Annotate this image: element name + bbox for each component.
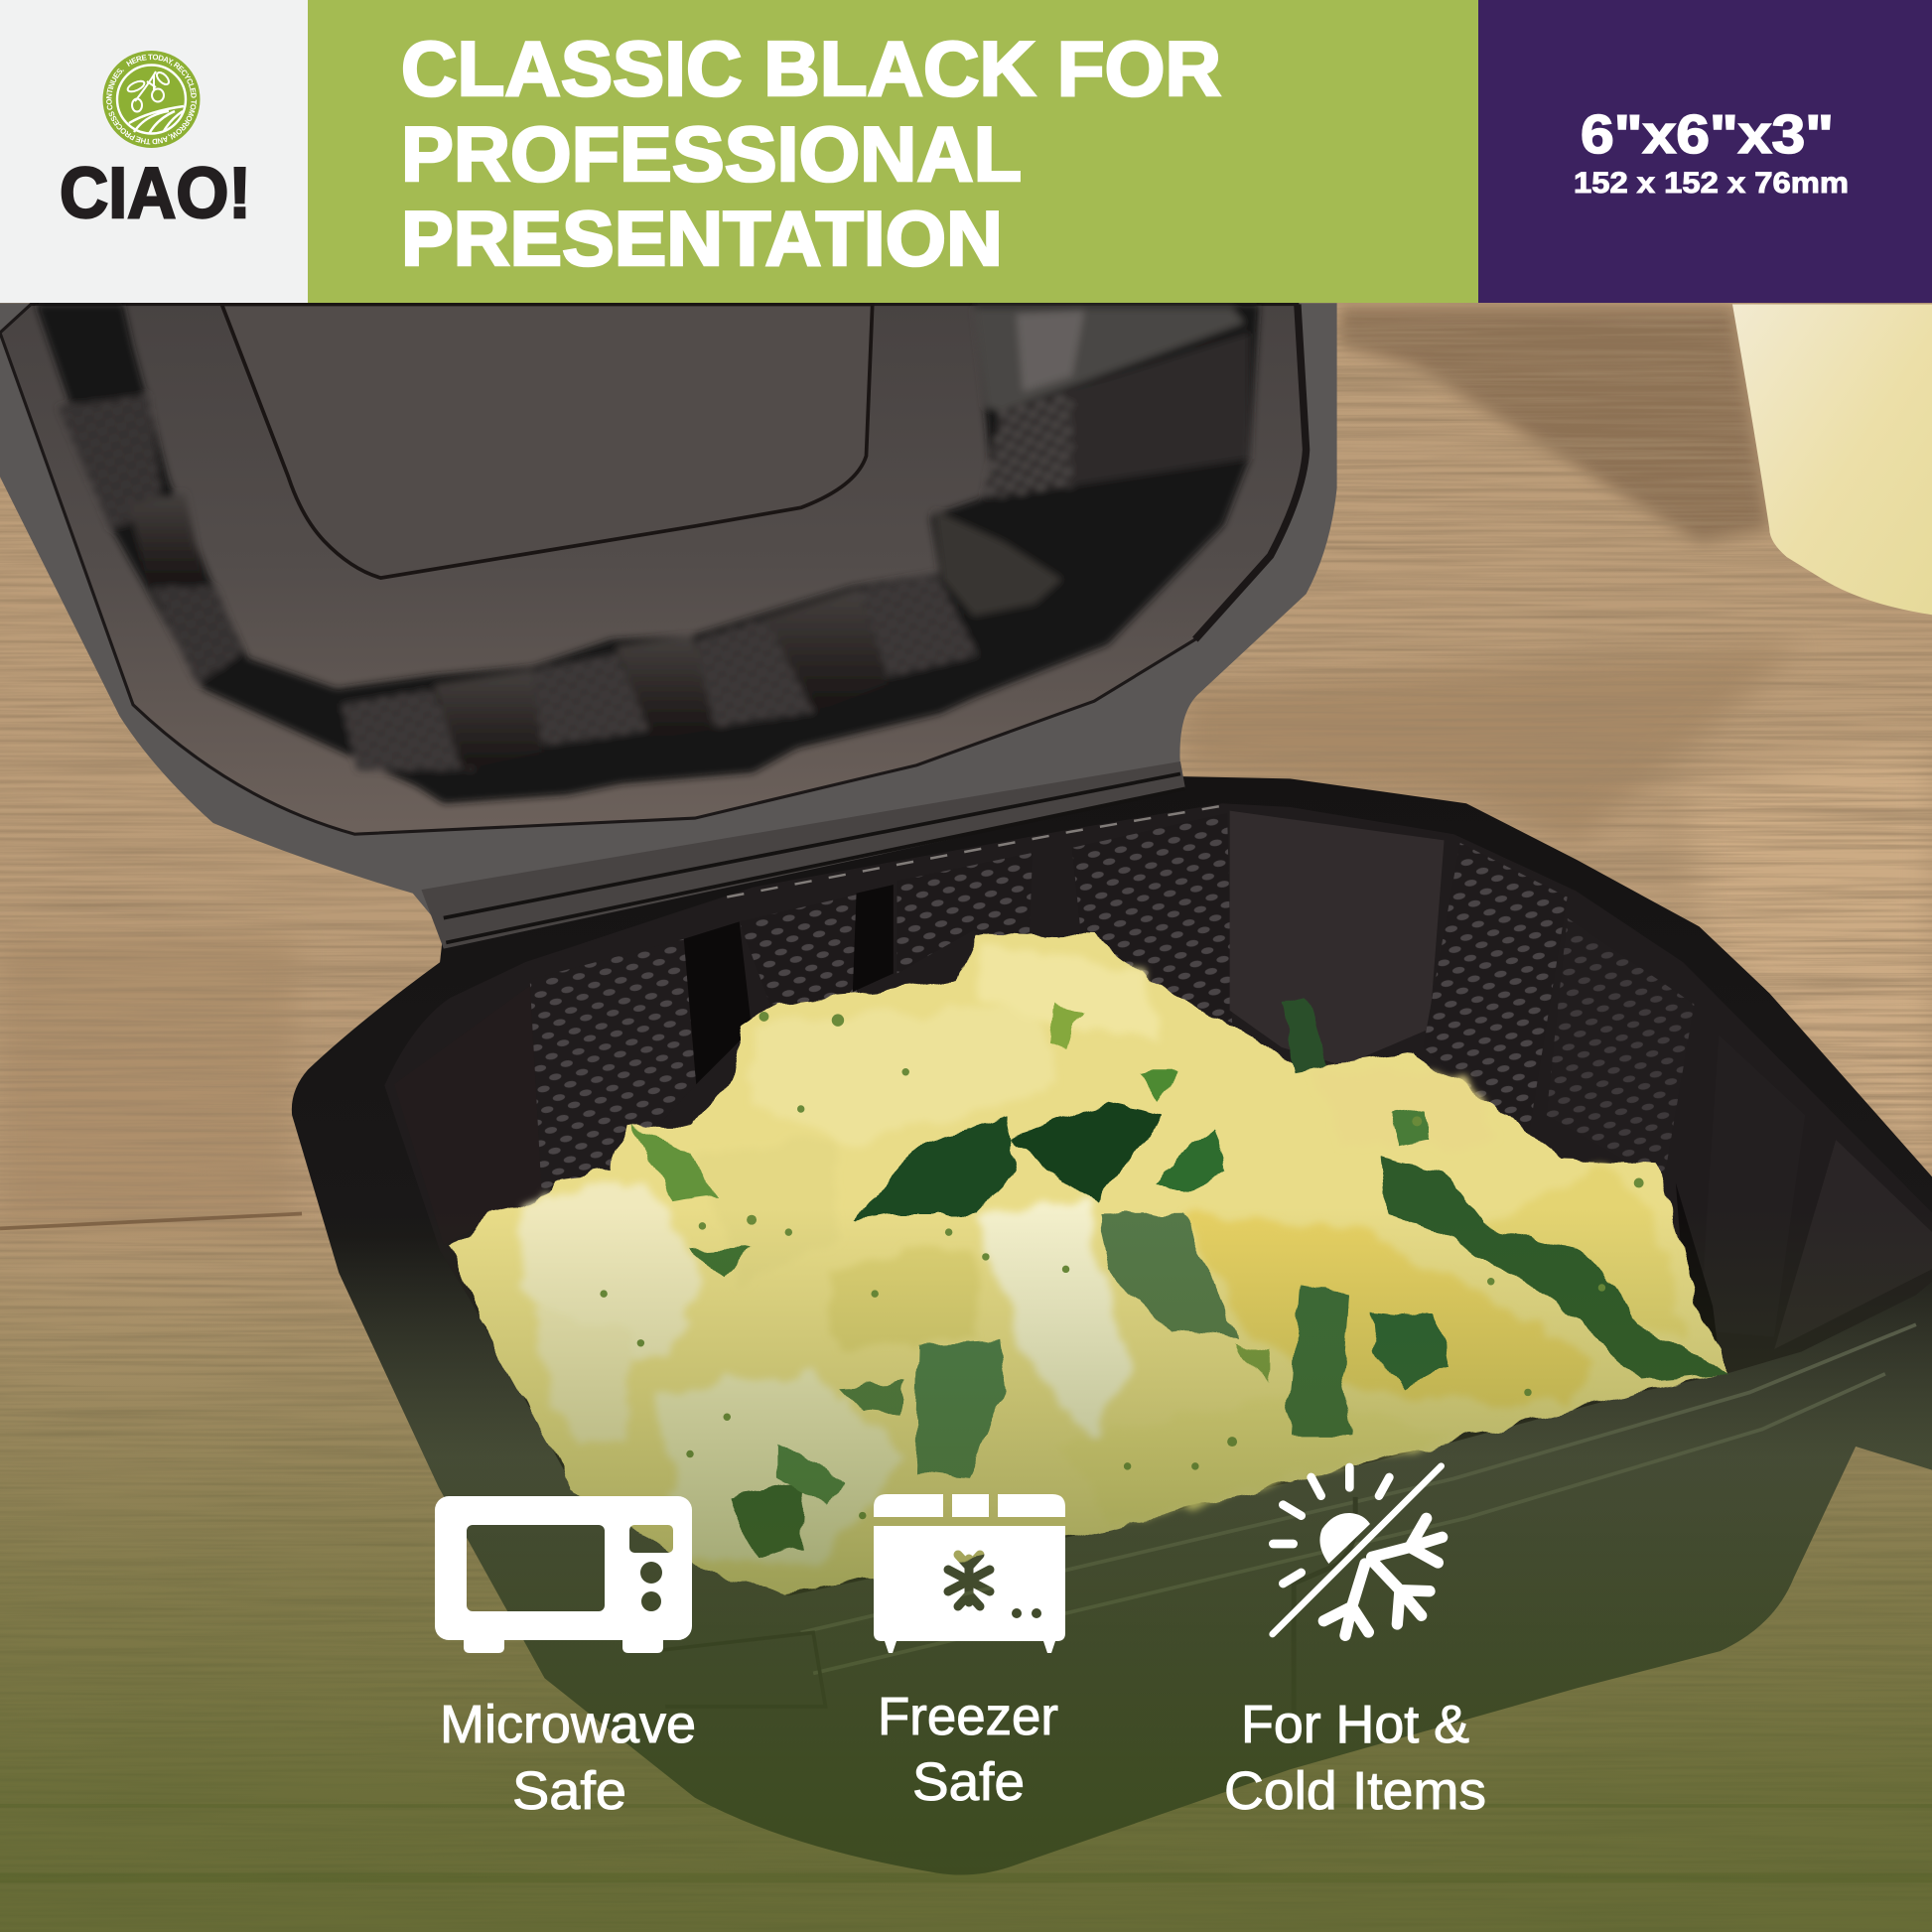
tray of container: [292, 776, 1932, 1875]
title: PRESENTATION: [401, 195, 1003, 282]
spinach: [632, 998, 1731, 1559]
logo wordmark: CIAO!: [60, 154, 251, 233]
tray rim highlights: [653, 806, 1916, 1749]
logo badge: HERE TODAY, RECYCLED TOMORROW, AND THE PROCESS CONTINUES.: [106, 54, 197, 145]
pasta: [450, 931, 1731, 1595]
herb specks: [600, 1012, 1644, 1519]
header: dimensions panel: 6"x6"x3": [1581, 103, 1834, 165]
lid recess: [36, 305, 1259, 803]
lid ledge: [0, 305, 1307, 834]
label: microwave safe: Microwave: [440, 1695, 696, 1754]
cup in background: [1732, 305, 1932, 615]
title: [401, 25, 1221, 282]
label: microwave safe: Safe: [512, 1761, 626, 1821]
feature: microwave safe: [435, 1496, 696, 1821]
feature: hot and cold items: [1224, 1466, 1486, 1821]
label: hot and cold items: For Hot &: [1241, 1695, 1469, 1754]
label: hot and cold items: Cold Items: [1224, 1761, 1486, 1821]
icon: sun and snowflake: [1273, 1466, 1443, 1635]
header: logo panel: [0, 0, 308, 303]
icon: freezer: [874, 1494, 1065, 1653]
lid centre panel: [221, 305, 873, 578]
icon: microwave: [435, 1496, 692, 1653]
header: dimensions panel: 152 x 152 x 76mm: [1574, 167, 1849, 200]
label: freezer safe: Freezer: [878, 1687, 1058, 1746]
title: CLASSIC BLACK FOR: [401, 25, 1221, 112]
header: dimensions panel: [1478, 0, 1932, 303]
tray inner wall: [384, 803, 1932, 1595]
pasta highlights and chicken: [520, 942, 1688, 1565]
tray wall panels: [394, 811, 1932, 1355]
label: hot and cold items: [1224, 1695, 1486, 1821]
label: freezer safe: [878, 1687, 1058, 1812]
lid of container: [0, 303, 1337, 949]
bottom green gradient: [0, 1207, 1932, 1932]
label: microwave safe: [440, 1695, 696, 1821]
header: title panel: [308, 0, 1478, 303]
hinge: [421, 761, 1185, 949]
label: freezer safe: Safe: [912, 1752, 1025, 1812]
feature: freezer safe: [874, 1494, 1065, 1812]
title: PROFESSIONAL: [401, 110, 1022, 198]
